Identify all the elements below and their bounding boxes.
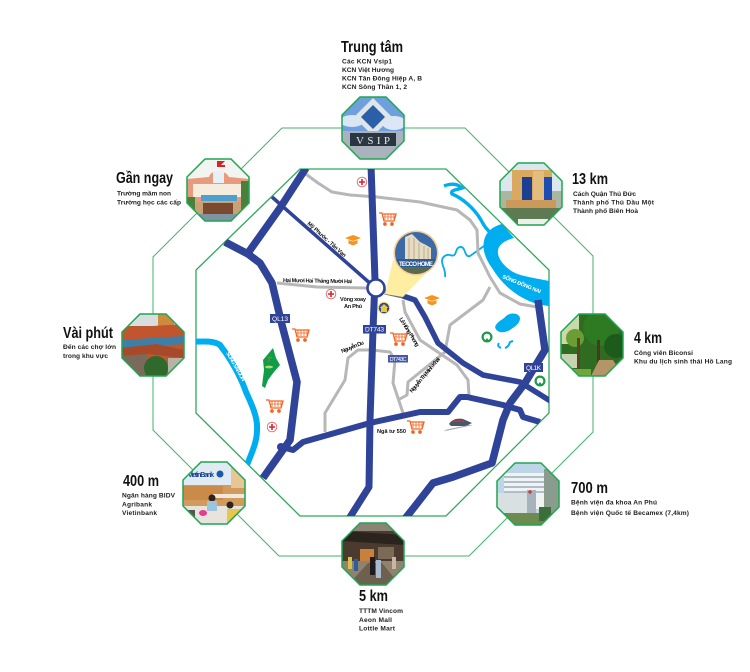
text: Gan ngay [116, 170, 181, 206]
photo: market [122, 314, 184, 380]
project badge: Tecco Home [394, 230, 438, 276]
river: Dong Nai [442, 184, 549, 348]
text: 400 m: Vietinbank [122, 510, 157, 517]
photo: VSIP: VSIP [356, 135, 390, 147]
roundabout [368, 280, 384, 296]
icon: home [378, 302, 390, 314]
text: Gan ngay: Gần ngay [116, 170, 173, 187]
text: 5 km: Lottle Mart [359, 626, 396, 632]
map contents [190, 165, 552, 525]
panel: map [190, 165, 552, 525]
light beam [385, 260, 427, 297]
text: Trung tam: Các KCN Vsip1 [342, 58, 392, 66]
text: Trung tam: KCN Việt Hương [342, 67, 394, 74]
blue roads [225, 165, 552, 525]
text: 700 m: Bệnh viện đa khoa An Phú [571, 500, 657, 506]
photo: mall [342, 523, 404, 585]
road labels: SÔNG SÀI GÒN [224, 350, 248, 383]
text: 13 km [572, 171, 655, 215]
road labels: Nguyễn Thị Minh Khai [408, 356, 442, 394]
icon: train [444, 419, 472, 431]
road badges [270, 314, 543, 372]
text: Trung tam [341, 39, 422, 91]
gray roads [277, 172, 537, 432]
text: 4 km [634, 330, 732, 366]
photo: bank: VietinBank [188, 472, 214, 479]
text: 13 km: Thành phố Thủ Dầu Một [573, 198, 655, 206]
outer octagon connector [153, 128, 593, 556]
text: 13 km: 13 km [572, 171, 608, 188]
photo: school [187, 159, 249, 221]
road labels: Ngã tư 550 [377, 429, 406, 435]
text: Vai phut [63, 325, 116, 360]
icon: schools [345, 235, 440, 306]
road labels: Hai Mươi Hai Tháng Mười Hai [283, 278, 352, 285]
text: 5 km: TTTM Vincom [359, 608, 403, 615]
road badges: QL1K [526, 365, 542, 372]
text: 13 km: Thành phố Biên Hoà [573, 207, 638, 215]
road labels: Vòng xoay [340, 297, 367, 303]
text: 4 km: 4 km [634, 330, 662, 347]
project badge: Tecco Home: TECCO HOME [399, 262, 433, 268]
road labels: An Phú [344, 304, 363, 310]
road badges: QL13 [272, 316, 288, 323]
road badges: DT743C [390, 357, 406, 363]
text: Gan ngay: Trường mầm non [117, 188, 171, 198]
photo: hospital [497, 463, 559, 525]
icon: parks [483, 333, 544, 386]
road junction blob [277, 443, 285, 451]
golf course [262, 348, 280, 388]
text: Gan ngay: Trường học các cấp [117, 198, 181, 206]
text: 400 m: Ngân hàng BIDV [122, 492, 176, 500]
icon: hospitals [267, 177, 367, 432]
road labels: SÔNG ĐỒNG NAI [501, 272, 543, 295]
river: Sai Gon [190, 341, 257, 465]
text: 700 m: 700 m [571, 480, 608, 497]
text: 400 m: Agribank [122, 502, 152, 508]
text: 700 m: Bệnh viện Quốc tế Becamex (7,4km) [571, 509, 689, 517]
text: 13 km: Cách Quận Thủ Đức [573, 191, 636, 198]
road labels: Nguyễn Du [340, 339, 366, 355]
road labels: Lê Hồng Phong [397, 317, 420, 349]
text: 4 km: Khu du lịch sinh thái Hồ Lang [634, 356, 732, 366]
text: 4 km: Công viên Biconsi [634, 350, 693, 357]
road labels: Mỹ Phước - Tân Vạn [306, 221, 347, 259]
text: 400 m [122, 473, 176, 517]
text: Vai phut: Vài phút [63, 325, 113, 342]
photo: 13 km tower [500, 163, 562, 225]
road labels [224, 221, 543, 435]
photo: VSIP [340, 97, 406, 159]
text: Vai phut: Đến các chợ lớn [63, 343, 116, 351]
icon: carts [266, 213, 424, 433]
text: 5 km: 5 km [359, 588, 388, 605]
photo: park [561, 310, 628, 376]
text: Trung tam: KCN Tân Đông Hiệp A, B [342, 76, 422, 82]
text: 700 m [571, 480, 689, 517]
text: Trung tam: Trung tâm [341, 39, 403, 56]
text: 400 m: 400 m [123, 473, 159, 490]
text: 5 km [359, 588, 403, 632]
text: Vai phut: trong khu vực [63, 353, 108, 360]
text: 5 km: Aeon Mall [359, 617, 392, 624]
map outline [196, 169, 549, 516]
photo: bank [183, 462, 245, 524]
road badges: DT743 [365, 326, 384, 334]
text: Trung tam: KCN Sông Thần 1, 2 [342, 82, 407, 91]
